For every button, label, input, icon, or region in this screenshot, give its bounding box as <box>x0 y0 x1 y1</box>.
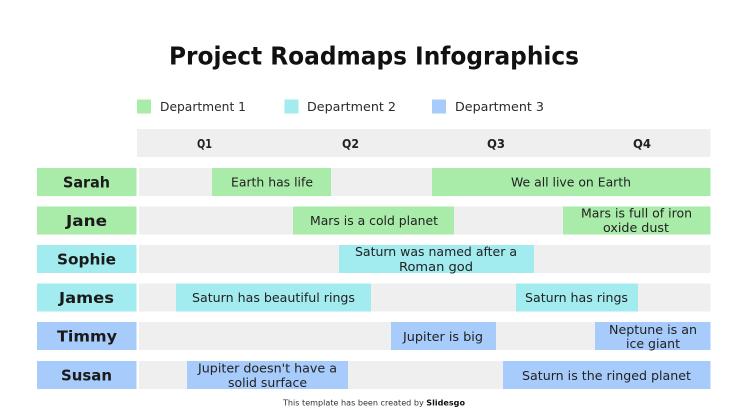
legend: department 1: Department 1 <box>160 99 246 114</box>
row: Jane: Jane <box>65 212 107 230</box>
row: Timmy <box>37 322 710 351</box>
quarter header <box>137 129 710 157</box>
task: Jupiter doesn't have a solid surface: Jupiter doesn't have a <box>197 362 337 376</box>
row: Sarah <box>37 168 710 196</box>
task: Jupiter doesn't have a solid surface <box>187 361 348 390</box>
row: Sophie: Sophie <box>57 250 116 268</box>
task: Neptune is an ice giant: Neptune is an <box>609 323 697 337</box>
legend: department 2: Department 2 <box>307 99 396 114</box>
task: Mars is full of iron oxide dust: oxide dust <box>603 221 669 235</box>
task: Mars is a cold planet: Mars is a cold planet <box>310 214 438 228</box>
task: Mars is a cold planet <box>293 206 454 234</box>
row: Jane <box>37 206 710 235</box>
task: Jupiter is big: Jupiter is big <box>402 330 483 344</box>
quarter header: Q4 <box>633 136 651 151</box>
quarter header: Q1 <box>197 136 212 151</box>
quarter header: Q2 <box>342 136 359 151</box>
legend: department 3: Department 3 <box>455 99 544 114</box>
task: Neptune is an ice giant: ice giant <box>626 337 680 351</box>
task: Jupiter doesn't have a solid surface: solid surface <box>228 376 307 390</box>
task: Saturn was named after a Roman god <box>339 245 534 274</box>
task: Saturn has beautiful rings: Saturn has beautiful rings <box>192 291 355 305</box>
quarter header: Q3 <box>487 136 505 151</box>
footer credit: This template has been created by Slidesgo <box>282 398 466 408</box>
task: Saturn was named after a Roman god: Roman god <box>399 260 473 274</box>
task: Earth has life: Earth has life <box>231 176 313 190</box>
row: Susan: Susan <box>61 366 112 384</box>
task: We all live on Earth: We all live on Earth <box>511 176 631 190</box>
task: Saturn has rings: Saturn has rings <box>525 291 628 305</box>
task: Saturn is the ringed planet: Saturn is the ringed planet <box>522 369 691 383</box>
task: We all live on Earth <box>432 168 710 196</box>
row: James: James <box>58 289 114 307</box>
title: Project Roadmaps Infographics <box>169 42 579 70</box>
task: Saturn has beautiful rings <box>176 284 371 312</box>
row: Sophie <box>37 245 710 274</box>
row: Sarah: Sarah <box>63 174 110 192</box>
task: Saturn has rings <box>516 284 638 312</box>
task: Mars is full of iron oxide dust <box>563 206 710 235</box>
row: Susan <box>37 361 710 390</box>
row: Timmy: Timmy <box>57 328 117 346</box>
legend <box>137 99 544 114</box>
task: Earth has life <box>212 168 331 196</box>
task: Saturn is the ringed planet <box>503 361 710 389</box>
task: Mars is full of iron oxide dust: Mars is full of iron <box>581 206 692 220</box>
row: James <box>37 284 710 312</box>
task: Jupiter is big <box>391 322 496 350</box>
task: Saturn was named after a Roman god: Saturn was named after a <box>355 245 517 259</box>
task: Neptune is an ice giant <box>595 322 710 351</box>
